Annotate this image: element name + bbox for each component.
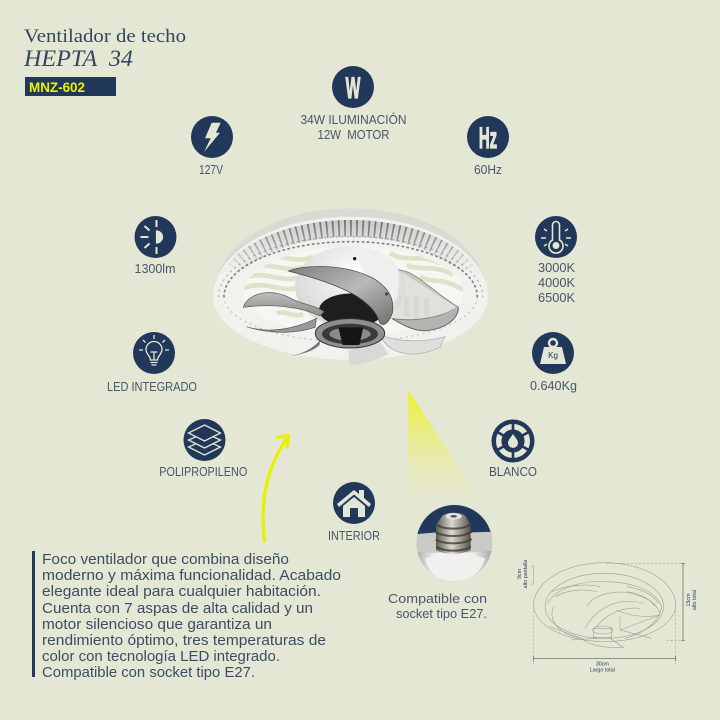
dimension lines [531, 563, 681, 665]
description panel: color con tecnología LED integrado. [42, 649, 280, 665]
spec: usage [328, 482, 380, 543]
fan line drawing [534, 563, 676, 648]
icon: W: W [346, 72, 361, 106]
spec: frequency: 60Hz [474, 163, 502, 177]
icon: half sun [134, 216, 176, 258]
fan blade: lower left [247, 318, 317, 332]
spec: wattage: 12W MOTOR [318, 128, 390, 142]
spec: usage: INTERIOR [328, 529, 380, 543]
fan dots [224, 242, 477, 297]
fan central dome [295, 246, 405, 327]
fan blade: right [392, 270, 458, 331]
description panel: Compatible con socket tipo E27. [42, 665, 255, 681]
spec: colour [489, 420, 537, 479]
icon: colour wheel [492, 420, 534, 462]
dimension diagram [517, 560, 698, 674]
spec: wattage: 34W ILUMINACIÓN [300, 112, 406, 127]
fan motor [319, 293, 384, 327]
title: Ventilador de techo [24, 26, 186, 47]
icon: light bulb [133, 332, 175, 374]
fan light ring [315, 319, 385, 348]
fan blade: left [243, 293, 324, 316]
spec: wattage [300, 66, 406, 142]
description panel: elegante ideal para cualquier habitación. [42, 584, 321, 600]
spec: temperature: 3000K [538, 261, 576, 275]
description panel: Cuenta con 7 aspas de alta calidad y un [42, 601, 313, 617]
model badge [25, 77, 116, 96]
product photo: E27 socket [416, 505, 492, 581]
fan blade: small lower left [291, 339, 321, 356]
title: HEPTA 34 [23, 46, 133, 71]
icon: thermometer [535, 216, 577, 258]
icon: Hz: Hz [479, 123, 497, 156]
socket caption: Compatible con [388, 592, 487, 606]
spec: frequency [467, 116, 509, 177]
dimension diagram: 9cm [517, 568, 523, 579]
spec: material: POLIPROPILENO [159, 465, 248, 479]
spec: bulb [107, 332, 197, 394]
icon: bolt [191, 116, 233, 158]
spec: voltage [191, 116, 233, 177]
model badge: MNZ-602 [29, 80, 85, 95]
arrow [263, 436, 288, 541]
fan blade: pale right lower [380, 335, 445, 354]
fan inner opening with waves [244, 252, 463, 318]
icon: kg weight: Kg [548, 351, 558, 360]
fan blade: centre top [288, 266, 393, 325]
fan crystal ring [213, 217, 488, 360]
dimension diagram: alto pantalla [523, 560, 529, 588]
spec: temperature: 6500K [538, 291, 576, 305]
dimension diagram: 15cm [686, 593, 692, 607]
spec: bulb: LED INTEGRADO [107, 380, 197, 394]
description panel: motor silencioso que garantiza un [42, 617, 272, 633]
product photo: ceiling fan [213, 208, 488, 365]
icon: layers [184, 419, 226, 461]
description panel: rendimiento óptimo, tres temperaturas de [42, 633, 326, 649]
spec: voltage: 127V [199, 163, 224, 177]
spec: temperature: 4000K [538, 276, 576, 290]
spec: weight [530, 332, 577, 393]
socket caption [388, 592, 487, 621]
dimension diagram: Largo total [590, 668, 615, 674]
description panel: moderno y máxima funcionalidad. Acabado [42, 568, 341, 584]
dimension labels: 30cm [596, 662, 609, 668]
fan blade: pale lower [348, 342, 388, 365]
dimension diagram: alto total [692, 590, 698, 610]
icon: house [333, 482, 375, 524]
fan top rim [216, 208, 485, 290]
spec: lumens [134, 216, 176, 276]
fan centre cap [338, 327, 363, 345]
spec: material [159, 419, 248, 479]
title [23, 26, 186, 71]
socket caption: socket tipo E27. [396, 607, 487, 621]
description panel [32, 551, 341, 681]
light beam [408, 390, 485, 506]
spec: colour: BLANCO [489, 465, 537, 479]
description panel: Foco ventilador que combina diseño [42, 552, 289, 568]
fan ribs [224, 228, 477, 297]
spec: weight: 0.640Kg [530, 379, 577, 393]
spec: temperature [535, 216, 577, 305]
spec: lumens: 1300lm [134, 262, 176, 276]
